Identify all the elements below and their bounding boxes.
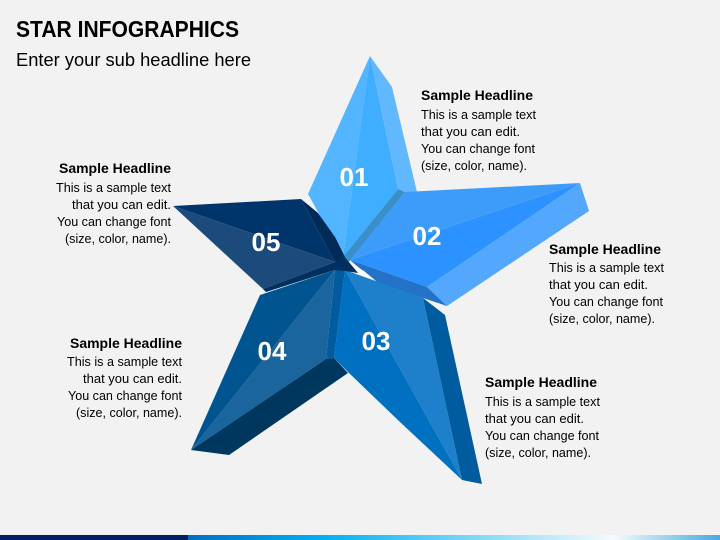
text block 05: (size, color, name). bbox=[65, 232, 171, 246]
star arm 02: 02 bbox=[413, 221, 441, 251]
text block 05: that you can edit. bbox=[72, 198, 171, 212]
subtitle: Enter your sub headline here bbox=[16, 50, 251, 70]
star arm 03: 03 bbox=[362, 326, 390, 356]
text block 05: This is a sample text bbox=[56, 181, 172, 195]
star arm 01 bbox=[308, 56, 417, 262]
star arm 05 bbox=[173, 199, 358, 292]
text block 03: This is a sample text bbox=[485, 395, 601, 409]
text block 02: that you can edit. bbox=[549, 278, 648, 292]
text block 01: that you can edit. bbox=[421, 125, 520, 139]
text block 01 bbox=[421, 87, 537, 173]
text block 02: (size, color, name). bbox=[549, 312, 655, 326]
star arm 03 bbox=[334, 270, 482, 484]
text block 03 bbox=[485, 374, 601, 460]
text block 05: You can change font bbox=[57, 215, 172, 229]
text block 02 bbox=[549, 241, 665, 326]
text block 04: Sample Headline bbox=[70, 335, 182, 351]
text block 04: You can change font bbox=[68, 389, 183, 403]
footer bar bbox=[0, 535, 720, 540]
text block 05: Sample Headline bbox=[59, 160, 171, 176]
text block 02: This is a sample text bbox=[549, 261, 665, 275]
text block 04 bbox=[67, 335, 183, 420]
text block 03: that you can edit. bbox=[485, 412, 584, 426]
star arm 01: 01 bbox=[340, 162, 368, 192]
text block 05 bbox=[56, 160, 172, 246]
text block 04: that you can edit. bbox=[83, 372, 182, 386]
text block 02: Sample Headline bbox=[549, 241, 661, 257]
title: STAR INFOGRAPHICS bbox=[16, 16, 239, 42]
star arm 04: 04 bbox=[258, 336, 287, 366]
text block 03: Sample Headline bbox=[485, 374, 597, 390]
text block 04: (size, color, name). bbox=[76, 406, 182, 420]
text block 01: Sample Headline bbox=[421, 87, 533, 103]
text block 01: You can change font bbox=[421, 142, 536, 156]
white gap sliver bbox=[353, 265, 376, 281]
text block 02: You can change font bbox=[549, 295, 664, 309]
star graphic bbox=[173, 56, 589, 484]
star arm 02 bbox=[350, 183, 589, 306]
text block 04: This is a sample text bbox=[67, 355, 183, 369]
star arm 04 bbox=[191, 270, 348, 455]
text block 03: You can change font bbox=[485, 429, 600, 443]
star arm 05: 05 bbox=[252, 227, 280, 257]
text block 01: (size, color, name). bbox=[421, 159, 527, 173]
text block 01: This is a sample text bbox=[421, 108, 537, 122]
text block 03: (size, color, name). bbox=[485, 446, 591, 460]
